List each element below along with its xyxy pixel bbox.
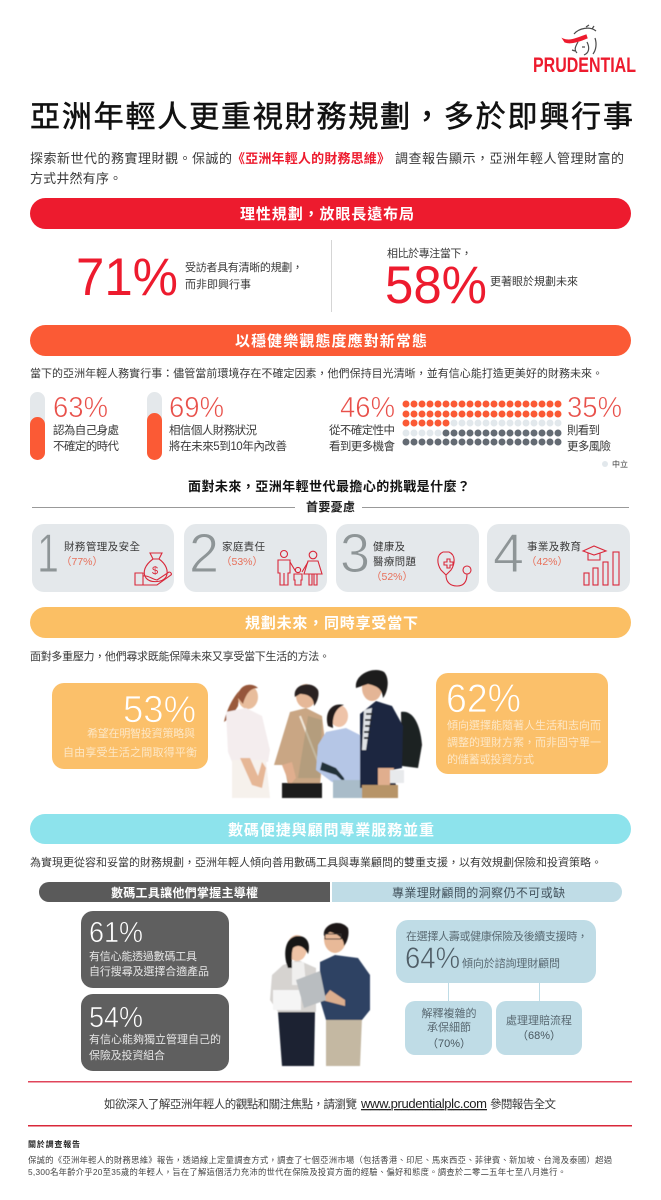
intro text: 《亞洲年輕人的財務思維》 [232, 151, 390, 166]
logo: Prudential [533, 25, 636, 77]
section text: 面對多重壓力，他們尋求既能保障未來又享受當下生活的方法。 [30, 649, 330, 663]
stat box: 61%: 61% [89, 917, 143, 949]
stat: 35% risk [567, 392, 622, 453]
card: concern 3 [336, 522, 479, 592]
sub-box: explain terms: （70%） [427, 1037, 471, 1050]
stat: 58%: 相比於專注當下， [387, 246, 472, 260]
stat box: 61% [81, 911, 229, 988]
stat: 46% opportunity: 46% [340, 392, 395, 424]
card: concern 4 [487, 522, 630, 592]
sub-box: claims [496, 1001, 582, 1055]
stat: 63% thermometer: 不確定的時代 [53, 439, 120, 453]
about the survey: 關於調查報告 [28, 1139, 80, 1149]
intro text: 探索新世代的務實理財觀。保誠的 [30, 151, 232, 166]
tablet [296, 971, 326, 1008]
callout: 53%: 希望在明智投資策略與 [87, 726, 195, 740]
legend: neutral: 中立 [612, 459, 628, 469]
section bar: plan and enjoy [30, 607, 631, 638]
card: concern 3: 3 [340, 522, 370, 584]
callout: 64% advisor: 傾向於諮詢理財顧問 [462, 956, 560, 970]
callout: 62%: 的儲蓄或投資方式 [447, 752, 534, 766]
call to action: 參閱報告全文 [490, 1097, 556, 1111]
callout: 62%: 傾向選擇能隨著人生活和志向而 [447, 718, 601, 732]
photo: two people with tablet [270, 923, 370, 1066]
callout: 64% advisor: 64% [405, 942, 460, 975]
callout: 62%: 調整的理財方案，而非固守單一 [447, 735, 601, 749]
section bar: rational planning [30, 198, 631, 229]
sub-box: claims: 處理理賠流程 [506, 1013, 572, 1027]
intro text: 調查報告顯示，亞洲年輕人管理財富的 [395, 151, 624, 166]
callout: 62%: 62% [446, 677, 521, 721]
section bar: digital and advisors [30, 814, 631, 844]
section bar: rational planning: 理性規劃，放眼長遠布局 [240, 205, 414, 223]
stat: 63% thermometer [30, 392, 120, 460]
section bar: steady attitude: 以穩健樂觀態度應對新常態 [235, 332, 427, 350]
about the survey: 保誠的《亞洲年輕人的財務思維》報告，透過線上定量調查方式，調查了七個亞洲市場（包括香港、印尼、馬來西亞、菲律賓、新加坡、台灣及泰國）超過 [28, 1155, 613, 1165]
backpack [401, 712, 422, 768]
section bar: steady attitude [30, 325, 631, 356]
person 3 [316, 704, 363, 798]
section text: 為實現更從容和妥當的財務規劃，亞洲年輕人傾向善用數碼工具與專業顧問的雙重支援，以有效規劃保險和投資策略。 [30, 855, 602, 869]
card: concern 3: （52%） [371, 571, 413, 583]
split header: advisors [332, 882, 622, 902]
stat: 63% thermometer: 認為自己身處 [53, 423, 120, 437]
stat: 71%: 而非即興行事 [185, 278, 251, 291]
person 2 [274, 684, 326, 798]
card: concern 3: 醫療問題 [373, 555, 416, 568]
sub-box: explain terms [405, 1001, 492, 1055]
stat: 71%: 71% [76, 248, 178, 307]
callout: 53%: 自由享受生活之間取得平衡 [63, 745, 197, 759]
stat box: 54%: 保險及投資組合 [89, 1048, 165, 1062]
icon: money bag in hand [135, 553, 171, 585]
split header: advisors: 專業理財顧問的洞察仍不可或缺 [392, 885, 565, 900]
icon: graduation cap and bars [583, 546, 619, 585]
dot chart [402, 400, 562, 446]
stat: 46% opportunity: 從不確定性中 [329, 423, 395, 437]
card: concern 2: 2 [189, 522, 219, 584]
section text: 當下的亞洲年輕人務實行事：儘管當前環境存在不確定因素，他們保持目光清晰，並有信心能打造更美好的財務未來。 [30, 366, 603, 380]
subheading: top concerns: 首要憂慮 [306, 499, 355, 514]
stat box: 61%: 自行搜尋及選擇合適產品 [89, 964, 209, 978]
man [320, 923, 370, 1066]
card: concern 2 [184, 522, 327, 592]
stat: 35% risk: 35% [567, 392, 622, 424]
stat: 46% opportunity [329, 392, 396, 453]
icon: stethoscope [438, 552, 471, 586]
stat: 46% opportunity: 看到更多機會 [329, 439, 396, 453]
red rule bottom [28, 1125, 632, 1126]
stat: 58%: 58% [385, 256, 487, 315]
divider [331, 240, 332, 312]
card: concern 3: 健康及 [373, 540, 406, 553]
sub-box: explain terms: 承保細節 [427, 1020, 471, 1034]
card: concern 4: （42%） [526, 556, 568, 568]
callout: 53% [52, 683, 208, 769]
card: concern 1: 1 [37, 522, 59, 584]
red rule top [28, 1081, 632, 1082]
icon: Prudence head [563, 25, 596, 55]
callout: 64% advisor [396, 920, 596, 983]
stat: 58% [385, 246, 578, 315]
call to action: 如欲深入了解亞洲年輕人的觀點和關注焦點，請瀏覽 [104, 1097, 357, 1111]
stat: 71%: 受訪者具有清晰的規劃， [185, 260, 303, 274]
stat box: 54%: 有信心能夠獨立管理自己的 [89, 1032, 221, 1046]
stat box: 54%: 54% [89, 1002, 143, 1034]
stat box: 61%: 有信心能透過數碼工具 [89, 949, 197, 963]
card: concern 4: 4 [493, 522, 524, 584]
intro text: 方式井然有序。 [30, 171, 122, 186]
split header: digital tools: 數碼工具讓他們掌握主導權 [111, 885, 258, 900]
connectors [448, 983, 449, 1001]
section bar: plan and enjoy: 規劃未來，同時享受當下 [245, 614, 418, 632]
card: concern 1: $ [152, 565, 158, 577]
stat: 58%: 更著眼於規劃未來 [490, 274, 578, 288]
person 1 [224, 685, 270, 798]
legend: neutral [602, 459, 628, 469]
callout: 53%: 53% [123, 689, 196, 731]
person 4 [356, 670, 404, 798]
title: 亞洲年輕人更重視財務規劃，多於即興行事 [30, 101, 633, 134]
call to action: www.prudentialplc.com [360, 1096, 487, 1111]
about the survey [28, 1139, 613, 1177]
question heading: 面對未來，亞洲年輕世代最擔心的挑戰是什麼？ [188, 479, 470, 494]
woman [270, 935, 316, 1066]
card: concern 2: （53%） [221, 556, 263, 568]
stat: 35% risk: 則看到 [567, 423, 600, 437]
callout: 64% advisor: 在選擇人壽或健康保險及後續支援時， [406, 929, 588, 943]
section bar: digital and advisors: 數碼便捷與顧問專業服務並重 [228, 821, 434, 839]
stat: 63% thermometer: 63% [53, 392, 108, 424]
card: concern 1: 財務管理及安全 [64, 540, 140, 553]
sub-box: claims: （68%） [517, 1029, 561, 1042]
stat: 35% risk: 更多風險 [567, 439, 612, 453]
split header: digital tools [39, 882, 330, 902]
card: concern 1: （77%） [61, 556, 103, 568]
icon: family [278, 550, 322, 585]
about the survey: 5,300名年齡介乎20至35歲的年輕人，旨在了解這個活力充沛的世代在保險及投資方面的經驗、偏好和態度。調查於二零二五年七至八月進行。 [28, 1167, 566, 1177]
stat box: 54% [81, 994, 229, 1071]
callout: 62% [436, 673, 608, 774]
stat: 71% [76, 248, 303, 307]
card: concern 2: 家庭責任 [222, 540, 266, 553]
stat: 69% thermometer [147, 392, 287, 460]
stat: 69% thermometer: 相信個人財務狀況 [169, 423, 258, 437]
call to action [104, 1096, 556, 1111]
stat: 69% thermometer: 將在未來5到10年內改善 [169, 439, 287, 453]
sub-box: explain terms: 解釋複雜的 [422, 1006, 476, 1020]
photo: four young people talking [224, 670, 422, 798]
stat: 69% thermometer: 69% [169, 392, 224, 424]
card: concern 4: 事業及教育 [527, 540, 581, 553]
card: concern 1 [32, 522, 174, 592]
intro text [30, 151, 624, 186]
